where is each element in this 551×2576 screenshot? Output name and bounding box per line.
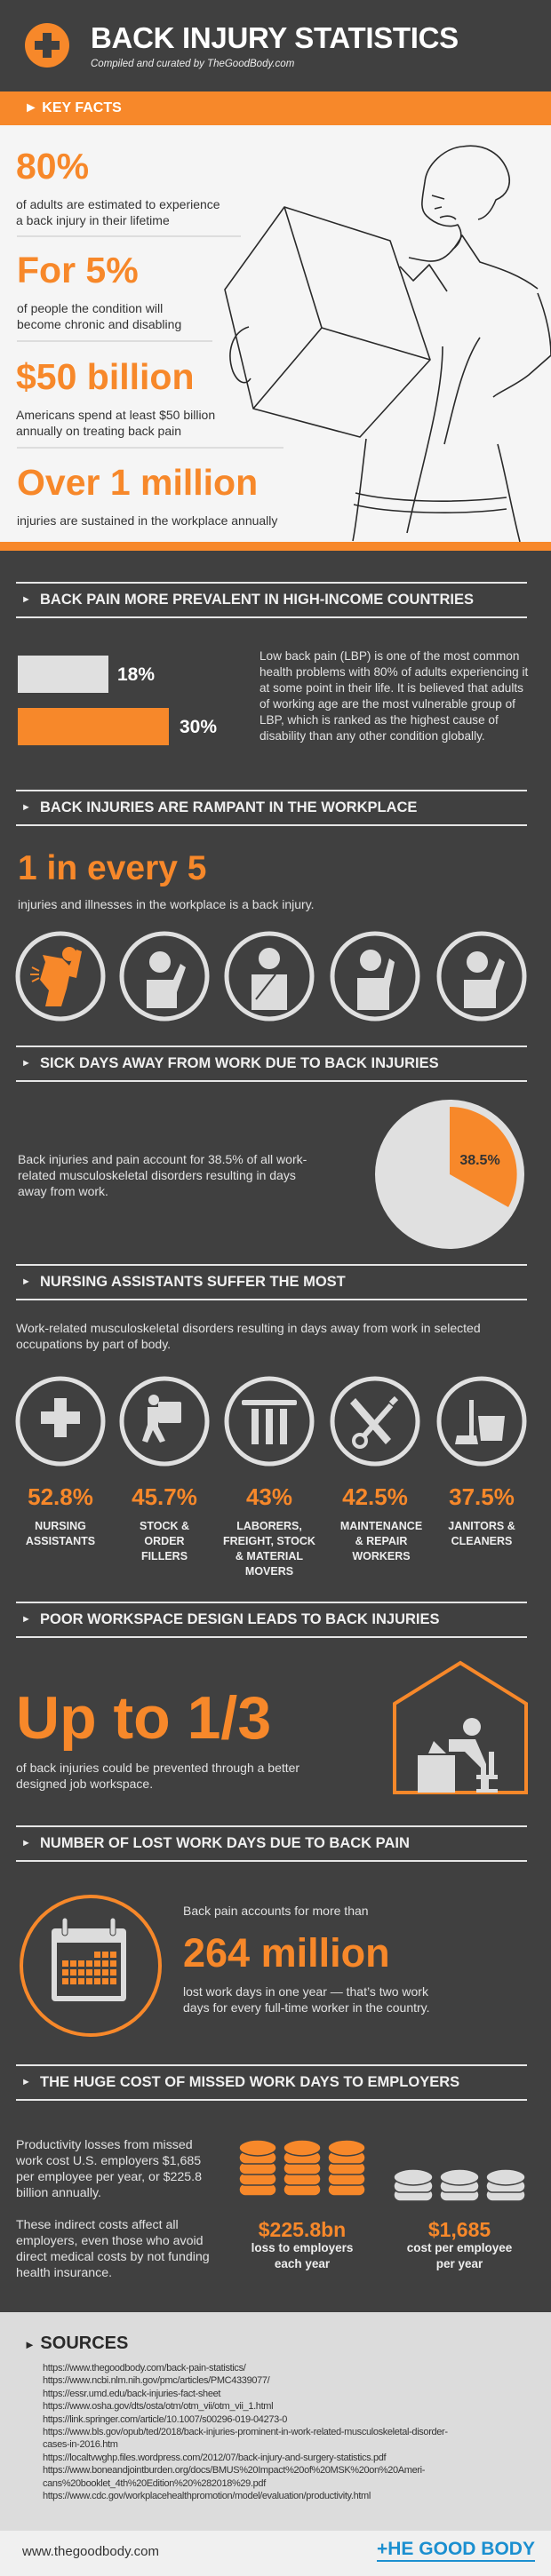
panel: sources: cases-in-2016.htm [43,2439,118,2450]
text: LBP: Low back pain (LBP) is one of the most common health problems with 80% of adults experiencing it at some point in their life. It is believed that adults of working age are the most vulnerable group of LBP, which is ranked as the highest cause of disability than any other condition globally. [260,649,528,743]
heading: lost days: NUMBER OF LOST WORK DAYS DUE TO BACK PAIN [40,1835,410,1851]
stat: up to 1/3: Up to 1/3 [16,1684,271,1752]
panel: sources: https://www.thegoodbody.com/back-pain-statistics/ [43,2363,245,2373]
stat: 80%: 80% [16,146,89,187]
footer: www.thegoodbody.com [22,2544,159,2559]
panel: sources [0,2312,551,2531]
stat: up to 1/3: of back injuries could be prevented through a better [16,1761,299,1775]
stat: over 1 million: injuries are sustained in the workplace annually [17,513,277,528]
heading: nursing: ► [21,1276,31,1287]
heading: nursing [16,1264,527,1300]
header [0,0,551,91]
heading: high-income: ► [21,594,31,605]
text: cost: These indirect costs affect all employers, even those who avoid direct medical costs by not funding health insurance. [16,2218,210,2280]
bar chart: 30% [180,717,217,737]
stats: occupations: FILLERS [141,1550,188,1562]
stat: 264 million [183,1904,430,2015]
heading: high-income: BACK PAIN MORE PREVALENT IN HIGH-INCOME COUNTRIES [40,592,474,608]
stats: occupations: JANITORS & [448,1520,515,1532]
stat: for 5%: become chronic and disabling [17,317,181,331]
stats: occupations: LABORERS, [236,1520,302,1532]
bar chart [18,656,217,745]
stat: $1,685: per year [436,2257,483,2270]
stat: 1 in every 5: 1 in every 5 [18,849,206,887]
stats: occupations: & MATERIAL [236,1550,303,1562]
stat: 264 million: 264 million [183,1930,390,1976]
stat: $225.8bn: $225.8bn [259,2218,346,2241]
stat: 264 million: days for every full-time worker in the country. [183,2000,430,2015]
key facts bar [0,91,551,125]
icon: calendar circle [20,1895,162,2037]
icons: occupations [16,1377,526,1466]
stats: occupations: ASSISTANTS [26,1535,95,1547]
stats: occupations: 52.8% [28,1483,93,1510]
heading: lost days [16,1825,527,1862]
stat: 80% [16,146,220,227]
heading: sick days [16,1046,527,1082]
stat: $50 billion: Americans spend at least $50 billion [16,408,215,422]
text: cost [16,2138,210,2280]
heading: cost [16,2064,527,2101]
text: nursing intro: Work-related musculoskeletal disorders resulting in days away from work in selected occupations by part of body. [16,1321,481,1351]
pie chart: 38.5% [459,1153,500,1168]
stat: 264 million: lost work days in one year — that’s two work [183,1984,428,1999]
heading: high-income [16,582,527,618]
stats: occupations: 42.5% [342,1483,408,1510]
heading: rampant [16,790,527,826]
text: sick days: Back injuries and pain account for 38.5% of all work-related musculoskeletal disorders resulting in days away from work. [18,1152,307,1198]
stat: $1,685 [407,2218,512,2270]
footer [0,2531,551,2576]
stats: occupations: FREIGHT, STOCK [223,1535,315,1547]
stat: for 5%: of people the condition will [17,301,163,315]
stats: occupations: 43% [246,1483,292,1510]
subtitle: Compiled and curated by TheGoodBody.com [91,59,294,69]
panel: sources: https://www.boneandjointburden.org/docs/BMUS%20Impact%20of%20MSK%20on%20Ameri- [43,2465,425,2476]
heading: sick days: SICK DAYS AWAY FROM WORK DUE TO BACK INJURIES [40,1055,439,1071]
stat: $50 billion [16,356,215,438]
stats: occupations: 37.5% [449,1483,515,1510]
heading: cost: ► [21,2077,31,2087]
stat: $225.8bn [252,2218,353,2270]
stat: up to 1/3 [16,1684,299,1791]
stats: occupations: WORKERS [352,1550,411,1562]
stat: $225.8bn: each year [275,2257,330,2270]
icon: house with desk worker [393,1661,528,1794]
heading: nursing: NURSING ASSISTANTS SUFFER THE MOST [40,1274,346,1290]
logo: +HE GOOD BODY [377,2539,535,2559]
illustration: man lifting box [224,145,551,542]
stats: occupations: CLEANERS [451,1535,512,1547]
stat: $1,685: $1,685 [428,2218,491,2241]
icon: orange plus circle [25,23,69,68]
heading: cost: THE HUGE COST OF MISSED WORK DAYS TO EMPLOYERS [40,2074,459,2090]
stat: over 1 million [17,462,277,528]
key facts bar: ► KEY FACTS [24,100,122,115]
stat: over 1 million: Over 1 million [17,462,258,503]
stat: up to 1/3: designed job workspace. [16,1777,153,1791]
stats: occupations: MOVERS [245,1565,293,1578]
panel: sources: https://localtvwghp.files.wordpress.com/2012/07/back-injury-and-surgery-statistics.pdf [43,2453,386,2463]
stat: 1 in every 5: injuries and illnesses in the workplace is a back injury. [18,897,315,911]
stats: occupations: ORDER [144,1535,185,1547]
heading: rampant: ► [21,802,31,813]
panel: sources: https://www.cdc.gov/workplacehealthpromotion/model/evaluation/productivity.html [43,2491,371,2501]
heading: lost days: ► [21,1838,31,1849]
panel: sources: https://www.ncbi.nlm.nih.gov/pmc/articles/PMC4339077/ [43,2375,269,2386]
heading: workspace: POOR WORKSPACE DESIGN LEADS TO BACK INJURIES [40,1611,440,1627]
stats: occupations: STOCK & [140,1520,189,1532]
stat: 1 in every 5 [18,849,315,911]
stat: $50 billion: annually on treating back pain [16,424,181,438]
stat: for 5% [17,250,181,331]
stats: occupations: & REPAIR [355,1535,407,1547]
panel: sources: https://www.bls.gov/opub/ted/2018/back-injuries-prominent-in-work-related-musculoskeletal-disorder- [43,2427,448,2437]
panel: sources: https://essr.umd.edu/back-injuries-fact-sheet [43,2389,220,2399]
stat: 264 million: Back pain accounts for more than [183,1904,369,1918]
bar chart: 18% [117,664,155,685]
stat: $50 billion: $50 billion [16,356,194,397]
stats: occupations [26,1483,515,1578]
icon: orange coin stacks [240,2141,364,2196]
stats: occupations: NURSING [35,1520,86,1532]
icon: gray coin stacks [395,2169,524,2201]
stat: for 5%: For 5% [17,250,139,290]
panel: sources: cans%20booklet_4th%20Edition%20%282018%29.pdf [43,2478,266,2489]
panel: sources: ► SOURCES [24,2334,128,2353]
stats: occupations: 45.7% [132,1483,197,1510]
stat: 80%: of adults are estimated to experience [16,197,220,211]
title: BACK INJURY STATISTICS [91,21,459,54]
panel: sources: https://www.osha.gov/dts/osta/otm/otm_vii/otm_vii_1.html [43,2401,273,2412]
stats: occupations: MAINTENANCE [340,1520,422,1532]
heading: rampant: BACK INJURIES ARE RAMPANT IN THE WORKPLACE [40,799,417,815]
heading: workspace [16,1602,527,1638]
panel: key facts [0,125,551,542]
text: cost: Productivity losses from missed work cost U.S. employers $1,685 per employee per year, or $225.8 billion annually. [16,2138,202,2200]
stat: 80%: a back injury in their lifetime [16,213,170,227]
stat: $1,685: cost per employee [407,2241,512,2254]
panel: sources: https://link.springer.com/article/10.1007/s00296-019-04273-0 [43,2414,287,2425]
heading: workspace: ► [21,1614,31,1625]
pie chart [375,1100,524,1249]
stat: $225.8bn: loss to employers [252,2241,353,2254]
icons: injury circles [16,931,526,1022]
heading: sick days: ► [21,1058,31,1069]
